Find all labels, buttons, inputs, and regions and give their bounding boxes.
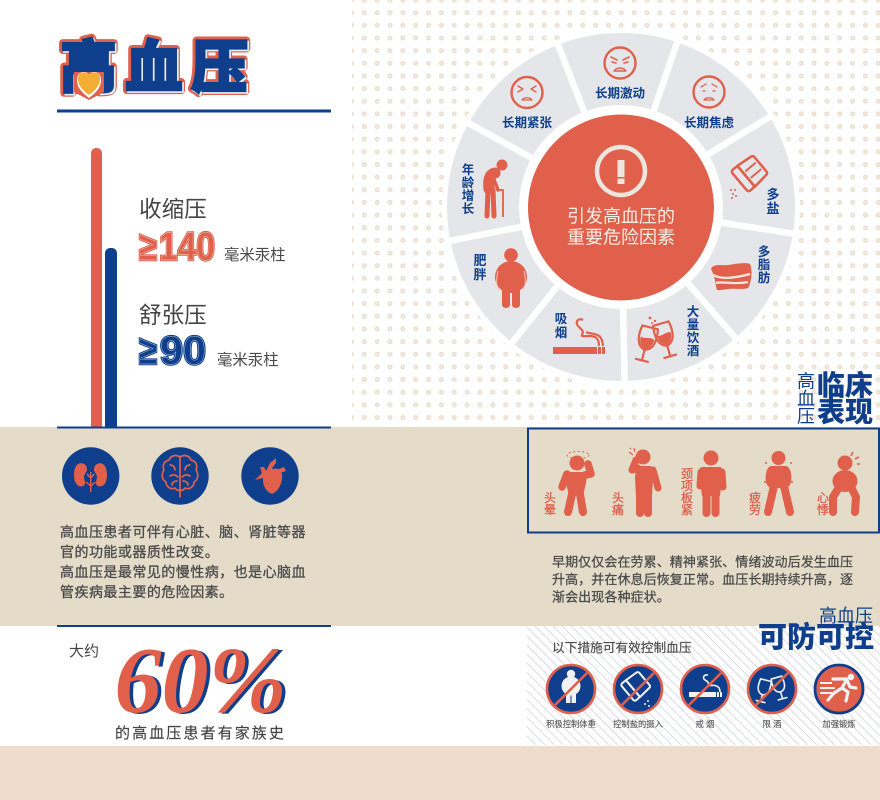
factor: 年龄增长: 增	[462, 188, 474, 203]
systolic value: ≥	[139, 225, 157, 269]
factor: 年龄增长: 年	[462, 162, 474, 177]
factor: 大量饮酒: 大	[687, 304, 700, 319]
diastolic unit: 毫米汞柱	[217, 350, 279, 369]
symptom: 疲劳: 疲	[749, 490, 761, 505]
symptom: 颈项板紧: 项	[681, 479, 693, 493]
heading: 临床表现: 临床	[817, 369, 873, 401]
text: organ damage	[60, 524, 306, 600]
text: symptoms description: 早期仅仅会在劳累、精神紧张、情绪波动后发生血压	[552, 554, 853, 570]
diastolic value: 90	[160, 329, 206, 373]
diastolic value: 90	[160, 329, 206, 373]
measure: 戒烟	[681, 665, 729, 729]
stat: 60%: 60%	[118, 630, 290, 734]
wheel base	[442, 28, 800, 386]
systolic value: 140	[159, 225, 215, 269]
systolic heading: 收缩压	[139, 197, 207, 222]
measure: 控制体重: 积极控制体重	[546, 719, 596, 729]
measure: 控制盐: 控制盐的摄入	[613, 719, 663, 729]
title: 血	[127, 38, 184, 102]
systolic unit: 毫米汞柱	[224, 245, 286, 264]
panel: prevention icons	[546, 665, 863, 729]
factor: 大量饮酒: 饮	[687, 330, 700, 345]
text: organ damage: 高血压是最常见的慢性病，也是心脑血	[60, 564, 306, 580]
symptom: 头晕: 晕	[544, 503, 556, 517]
measure: 限酒	[748, 665, 796, 729]
risk wheel	[442, 28, 800, 389]
icon: heart organ	[241, 447, 299, 505]
symptom: 心悸: 心	[817, 491, 829, 505]
title	[60, 36, 250, 102]
text: symptoms description: 升高，并在休息后恢复正常。血压长期持续升高，逐	[552, 572, 853, 587]
factor: 长期焦虑: 长期焦虑	[684, 115, 734, 130]
text: organ damage: 官的功能或器质性改变。	[60, 544, 219, 560]
heading: 临床表现: 压	[797, 406, 815, 426]
factor: 肥胖: 胖	[473, 267, 487, 282]
factor: 大量饮酒	[633, 304, 700, 363]
factor: 多盐: 多	[766, 187, 780, 202]
measure: 戒烟: 戒 烟	[696, 719, 714, 729]
factor: 吸烟	[553, 312, 605, 354]
symptom: 疲劳	[749, 451, 793, 517]
heading: 可防可控	[758, 606, 874, 654]
heading: 可防可控: 高血压	[819, 606, 873, 626]
text: about: 大约	[69, 643, 99, 660]
title: 高	[60, 36, 117, 100]
wheel centre text: 引发高血压的	[567, 206, 675, 226]
heading: 临床表现: 血	[797, 389, 815, 409]
factor: 肥胖	[473, 248, 527, 308]
icon: kidneys	[62, 447, 119, 505]
factor: 年龄增长: 长	[462, 201, 475, 216]
factor: 年龄增长	[462, 160, 508, 217]
factor: 大量饮酒: 酒	[687, 343, 699, 358]
factor: 多脂肪: 脂	[758, 258, 771, 272]
factor: 大量饮酒: 量	[687, 318, 699, 332]
symptom: 头晕: 头	[544, 491, 556, 505]
systolic value: 140	[159, 225, 215, 269]
title: 压	[191, 36, 248, 100]
bar: systolic	[91, 148, 102, 427]
measure: 加强锻炼	[815, 665, 863, 729]
title: 高	[60, 36, 117, 100]
factor: 吸烟: 烟	[555, 326, 567, 340]
symptom: 颈项板紧: 板	[681, 491, 693, 505]
panel: organ icons	[62, 447, 299, 505]
symptom: 疲劳: 劳	[749, 503, 761, 517]
measure: 加强锻炼: 加强锻炼	[822, 719, 856, 729]
icon: brain	[151, 447, 209, 505]
measure: 控制盐	[613, 665, 663, 729]
title: 血	[126, 36, 182, 100]
title: 压	[191, 36, 248, 100]
background: bottom band	[0, 746, 880, 800]
wheel centre circle	[528, 114, 714, 300]
symptom: 头晕	[544, 452, 591, 517]
bar: diastolic	[105, 248, 117, 427]
background: hatched panel	[527, 626, 880, 745]
heading: 可防可控: 可防可控	[758, 620, 874, 654]
factor: 长期紧张: 长期紧张	[502, 115, 552, 130]
background: dotted panel	[352, 0, 880, 427]
text: organ damage: 高血压患者可伴有心脏、脑、肾脏等器	[60, 524, 306, 540]
icon: exclamation	[597, 147, 645, 195]
stat: 60%: 60%	[114, 629, 287, 733]
divider	[57, 625, 331, 627]
text: family history: 的高血压患者有家族史	[115, 725, 286, 742]
wheel centre text: 重要危险因素	[567, 228, 675, 248]
diastolic value: ≥	[139, 329, 157, 373]
text: measures intro: 以下措施可有效控制血压	[552, 641, 692, 655]
symptom: 心悸: 悸	[817, 503, 829, 517]
factor: 长期紧张	[502, 77, 552, 130]
text: organ damage: 管疾病最主要的危险因素。	[60, 584, 234, 600]
symptom: 颈项板紧: 颈	[681, 467, 693, 481]
factor: 肥胖: 肥	[473, 253, 487, 268]
divider	[57, 110, 331, 112]
icon: heart	[74, 72, 104, 100]
background: beige band	[0, 427, 880, 626]
factor: 多盐	[730, 154, 780, 216]
symptom: 颈项板紧: 紧	[681, 503, 693, 517]
heading: 临床表现: 表现	[817, 396, 873, 428]
factor: 多盐: 盐	[766, 201, 780, 216]
factor: 长期激动	[595, 48, 645, 100]
title: 压	[192, 38, 250, 102]
symptom: 头痛: 痛	[612, 502, 624, 517]
factor: 吸烟: 吸	[555, 312, 568, 326]
divider	[57, 426, 331, 428]
symptom: 颈项板紧	[681, 450, 723, 517]
symptom: 头痛: 头	[612, 491, 624, 505]
factor: 多脂肪	[711, 244, 771, 290]
text: symptoms description: 渐会出现各种症状。	[552, 590, 670, 604]
wheel centre text	[567, 206, 675, 248]
title: 血	[126, 36, 182, 100]
heading: 临床表现	[797, 369, 873, 428]
diastolic value: ≥	[139, 329, 157, 373]
systolic value: ≥	[139, 225, 157, 269]
text: symptoms description	[552, 554, 853, 604]
factor: 多脂肪: 多	[758, 244, 770, 259]
title: 高	[62, 38, 118, 102]
measure: 限酒: 限 酒	[763, 719, 781, 729]
factor: 长期激动: 长期激动	[595, 86, 645, 100]
symptoms frame	[528, 428, 879, 532]
systolic value	[139, 225, 215, 269]
symptom: 心悸	[817, 452, 860, 517]
panel: symptoms	[528, 428, 879, 532]
factor: 年龄增长: 龄	[462, 175, 475, 190]
wheel ring	[483, 69, 759, 345]
heading: 临床表现: 高	[797, 372, 815, 392]
factor: 多脂肪: 肪	[758, 270, 771, 285]
diastolic value	[139, 329, 206, 373]
wheel spokes	[442, 36, 800, 389]
symptom: 头痛	[612, 448, 658, 517]
measure: 控制体重	[546, 665, 596, 729]
factor: 长期焦虑	[684, 76, 734, 130]
diastolic heading: 舒张压	[139, 303, 207, 328]
